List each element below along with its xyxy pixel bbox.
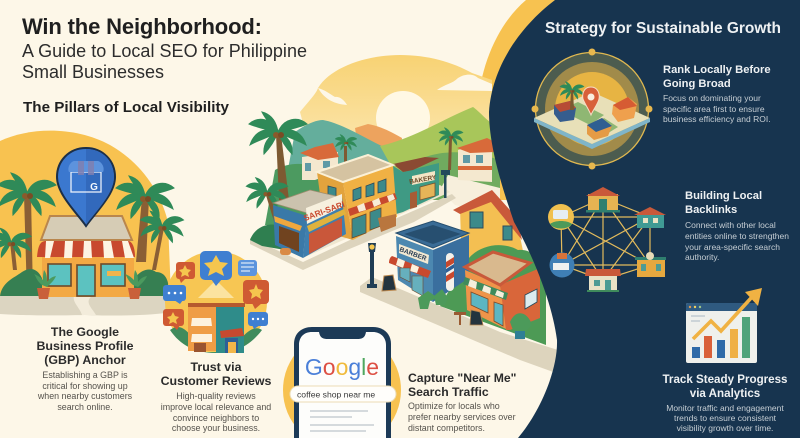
search bar: coffee shop near me — [297, 390, 375, 400]
text: Capture Near Me Search Traffic: distant competitors. — [408, 423, 485, 433]
text: Trust via Customer Reviews: choose your business. — [172, 423, 260, 433]
icon: small review bubbles — [163, 260, 269, 330]
hills — [265, 107, 500, 225]
text: Google Business Profile anchor: critical for showing up — [42, 381, 128, 391]
node: school top — [586, 187, 620, 212]
text: Building Local Backlinks — [685, 190, 789, 262]
panel: analytics — [662, 288, 788, 433]
panel: rank locally — [532, 48, 771, 170]
text: Building Local Backlinks: Connect with other local — [685, 220, 776, 230]
text: Trust via Customer Reviews: improve local relevance and — [161, 402, 271, 412]
text: Track Steady Progress via Analytics — [662, 373, 788, 433]
sun and sky — [300, 55, 492, 150]
yellow building — [317, 155, 397, 240]
text: Track Steady Progress via Analytics: Monitor traffic and engagement — [666, 403, 784, 413]
text: Google Business Profile anchor: The Google — [51, 325, 119, 339]
text: Google Business Profile anchor: (GBP) Anchor — [44, 353, 126, 367]
text: Rank Locally Before Going Broad: business efficiency and ROI. — [663, 114, 771, 124]
text: Rank Locally Before Going Broad: specific area first to ensure — [663, 104, 765, 114]
storefront building — [37, 216, 135, 297]
text: Capture Near Me Search Traffic: Search Traffic — [408, 385, 489, 399]
bakery building: BAKERY — [409, 174, 437, 186]
title: Win the Neighborhood: — [22, 14, 262, 39]
node: shop with clock — [635, 252, 666, 277]
panel: navy strategy background — [489, 0, 800, 438]
green grass behind shops — [440, 245, 546, 345]
palms — [246, 112, 463, 250]
text: Rank Locally Before Going Broad — [663, 64, 771, 124]
text: Track Steady Progress via Analytics: visibility growth over time. — [677, 423, 773, 433]
barber shop: BARBER — [398, 246, 427, 263]
text: Google Business Profile anchor — [36, 325, 134, 412]
title block — [22, 14, 307, 116]
back left house — [300, 143, 339, 180]
Sari-Sari store — [273, 190, 346, 258]
text: Google Business Profile anchor: Establishing a GBP is — [42, 370, 128, 380]
Sari-Sari store: SARI-SARI — [302, 199, 346, 223]
panel: near me search traffic — [283, 327, 516, 438]
panel: left Google Business Profile scene — [0, 131, 184, 412]
text: Rank Locally Before Going Broad: Focus on dominating your — [663, 93, 761, 103]
potted plants — [34, 270, 147, 299]
text: Trust via Customer Reviews: High-quality reviews — [176, 391, 256, 401]
text: Google Business Profile anchor: Business Profile — [36, 339, 134, 353]
subtitle: Small Businesses — [22, 62, 164, 82]
panel: local backlinks — [548, 187, 789, 292]
ground path — [0, 295, 172, 316]
text: Capture Near Me Search Traffic: Optimize for locals who — [408, 401, 500, 411]
text: Track Steady Progress via Analytics: Track Steady Progress — [662, 373, 788, 386]
lamp post upper — [441, 170, 450, 198]
text: Capture Near Me Search Traffic: Capture "Near Me" — [408, 371, 516, 385]
bakery building — [393, 157, 439, 215]
text: Rank Locally Before Going Broad: Rank Locally Before — [663, 64, 771, 76]
icon: Google Business map pin — [57, 148, 115, 226]
barber shop — [389, 221, 469, 309]
text: Trust via Customer Reviews — [161, 360, 272, 433]
orange coffee shop — [463, 252, 540, 330]
subtitle: A Guide to Local SEO for Philippine — [22, 41, 307, 61]
street furniture — [367, 243, 532, 339]
text: Capture Near Me Search Traffic — [408, 371, 516, 433]
text: Building Local Backlinks: authority. — [685, 252, 719, 262]
node: message circle — [548, 204, 574, 230]
icon: local radar map — [532, 48, 652, 170]
bushes — [0, 269, 169, 296]
node: storefront bottom — [585, 269, 621, 292]
text: Track Steady Progress via Analytics: trends to ensure consistent — [674, 413, 777, 423]
text: Trust via Customer Reviews: convince neighbors to — [173, 413, 259, 423]
text: Building Local Backlinks: Backlinks — [685, 204, 737, 216]
node: house right — [634, 207, 666, 228]
icon: network of local entities — [548, 187, 666, 292]
text: Capture Near Me Search Traffic: prefer nearby services over — [408, 412, 516, 422]
icon: analytics window with rising arrow — [686, 288, 762, 363]
back right house — [457, 138, 495, 182]
text: Trust via Customer Reviews: Trust via — [191, 360, 242, 374]
section heading: pillars: The Pillars of Local Visibility — [23, 99, 230, 116]
text: Building Local Backlinks: entities online to strengthen — [685, 231, 789, 241]
text: Google Business Profile anchor: when nearby customers — [37, 391, 133, 401]
road and sidewalks — [250, 175, 558, 373]
icon: Google Business map pin: G — [90, 182, 98, 193]
text: Google Business Profile anchor: search online. — [57, 402, 113, 412]
subtitle — [22, 41, 307, 82]
panel: customer reviews — [161, 251, 272, 433]
heading: Strategy for Sustainable Growth: Strategy for Sustainable Growth — [545, 20, 781, 37]
yellow corner house — [453, 190, 528, 275]
Google wordmark: Google — [305, 354, 379, 380]
panel: central neighborhood illustration — [246, 55, 558, 373]
node: barber circle — [550, 252, 574, 278]
icon: phone with Google search — [283, 327, 401, 438]
text: Building Local Backlinks: your area-specific search — [685, 242, 780, 252]
text: Building Local Backlinks: Building Local — [685, 190, 762, 202]
text: Rank Locally Before Going Broad: Going Broad — [663, 78, 731, 90]
text: Trust via Customer Reviews: Customer Reviews — [161, 374, 272, 388]
palm trees — [0, 173, 184, 296]
yellow arc behind navy panel — [477, 0, 555, 200]
icon: central star bubble — [200, 251, 232, 286]
icon: reviews circle — [163, 251, 269, 353]
text: Track Steady Progress via Analytics: via Analytics — [690, 387, 760, 400]
yellow sun backdrop — [0, 131, 171, 296]
